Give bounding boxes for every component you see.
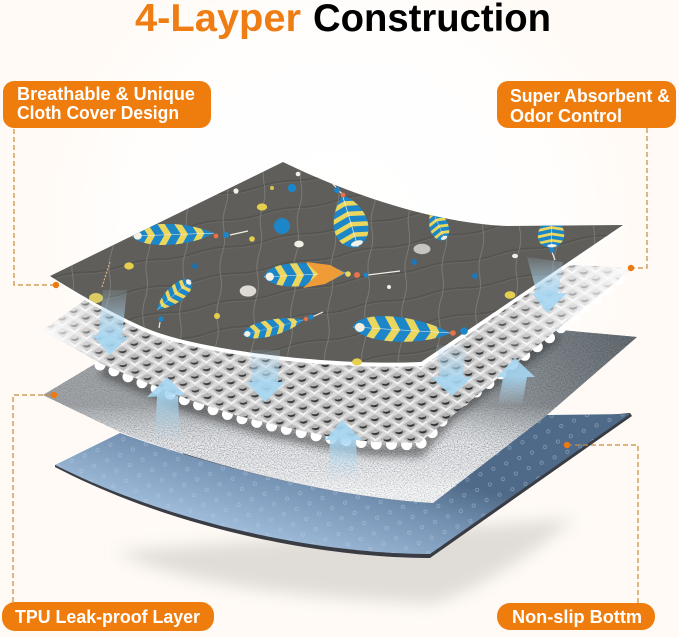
- label: breathable cover: [3, 81, 211, 128]
- leader line: TPU: [13, 392, 57, 602]
- quilting lines: [52, 170, 609, 363]
- label: super absorbent: Odor Control: [510, 106, 622, 126]
- label: super absorbent: Super Absorbent &: [510, 86, 670, 106]
- leader line: cover: [14, 129, 59, 288]
- arrow: down 1: [92, 290, 128, 355]
- leader line: non-slip: [564, 442, 638, 603]
- title: [135, 0, 551, 40]
- arrow: up 2: [325, 420, 362, 478]
- arrow: up 3: [497, 358, 535, 405]
- arrow: down 3: [431, 345, 472, 396]
- arrow: up 1: [147, 377, 185, 440]
- polka dots: [124, 172, 518, 366]
- layer 2: dimpled absorbent layer: [43, 265, 632, 451]
- feathers: [89, 189, 569, 349]
- label: TPU layer: [2, 602, 214, 631]
- layer 1: patterned cloth cover: [50, 162, 626, 367]
- arrow: down 2: [246, 350, 285, 402]
- layer 3: absorbent fiber core: [43, 330, 637, 503]
- leader line: absorbent: [628, 128, 647, 271]
- label: non-slip bottom: [497, 603, 655, 630]
- feather beads and strings: [102, 183, 555, 328]
- label: breathable cover: Breathable & Unique: [17, 84, 195, 104]
- arrow: down 4: [527, 257, 567, 313]
- label: non-slip bottom: Non-slip Bottm: [512, 606, 642, 627]
- ground shadow: [115, 518, 575, 604]
- layer 4: non-slip blue bottom: [55, 413, 632, 558]
- label: super absorbent: [497, 81, 676, 128]
- label: TPU layer: TPU Leak-proof Layer: [15, 606, 200, 627]
- label: breathable cover: Cloth Cover Design: [17, 103, 179, 123]
